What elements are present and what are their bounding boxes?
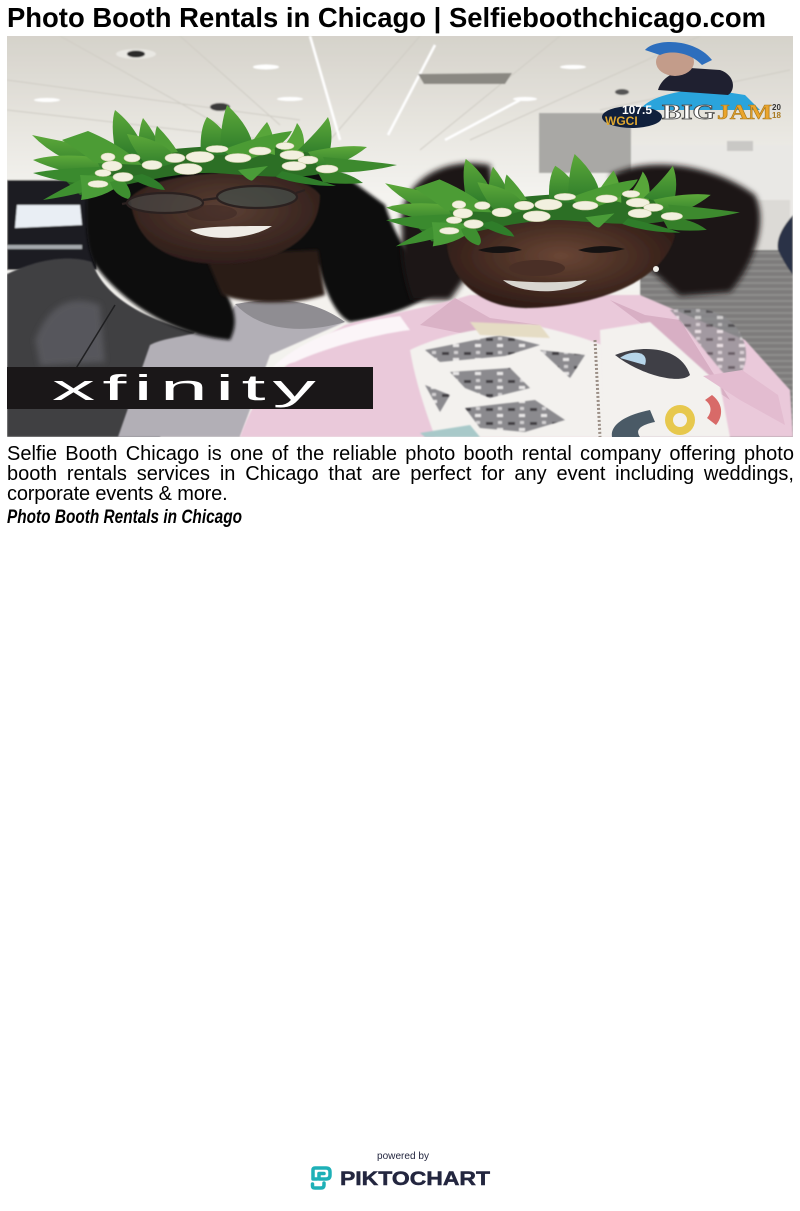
big jam logo sticker: 20 bbox=[772, 103, 781, 112]
sequin panel bbox=[410, 322, 605, 437]
room background bbox=[0, 30, 800, 440]
glasses bbox=[122, 186, 305, 213]
person right: hair, jacket, sequins and face bbox=[240, 163, 793, 437]
piktochart icon bbox=[312, 1168, 330, 1188]
title: Photo Booth Rentals in Chicago | Selfieboothchicago.com bbox=[7, 2, 766, 33]
description paragraph: booth rentals services in Chicago that are perfect for any event including weddings, bbox=[7, 463, 794, 485]
big jam logo sticker: JAM bbox=[717, 100, 772, 124]
xfinity banner bbox=[7, 367, 373, 409]
big jam logo sticker: 18 bbox=[772, 111, 781, 120]
flower crown: right guest bbox=[385, 154, 740, 246]
description paragraph: corporate events & more. bbox=[7, 483, 227, 505]
photo: two guests with flower crown filters bbox=[7, 36, 793, 437]
big jam logo sticker: BIG bbox=[662, 100, 715, 124]
big jam logo sticker: 107.5 bbox=[622, 103, 652, 117]
description paragraph bbox=[7, 443, 794, 505]
description paragraph: Selfie Booth Chicago is one of the reliable photo booth rental company offering photo bbox=[7, 443, 794, 465]
flower crown: left guest bbox=[32, 105, 397, 200]
italic subheading: Photo Booth Rentals in Chicago bbox=[7, 507, 242, 528]
xfinity banner: xfinity bbox=[52, 367, 323, 408]
piktochart wordmark: PIKTOCHART bbox=[340, 1168, 490, 1190]
powered by piktochart footer bbox=[310, 1150, 490, 1190]
person left: hair, jacket, shirt and face bbox=[7, 165, 445, 437]
big jam logo sticker bbox=[602, 42, 781, 128]
powered by text: powered by bbox=[377, 1150, 430, 1162]
big jam logo sticker: WGCI bbox=[605, 114, 638, 128]
